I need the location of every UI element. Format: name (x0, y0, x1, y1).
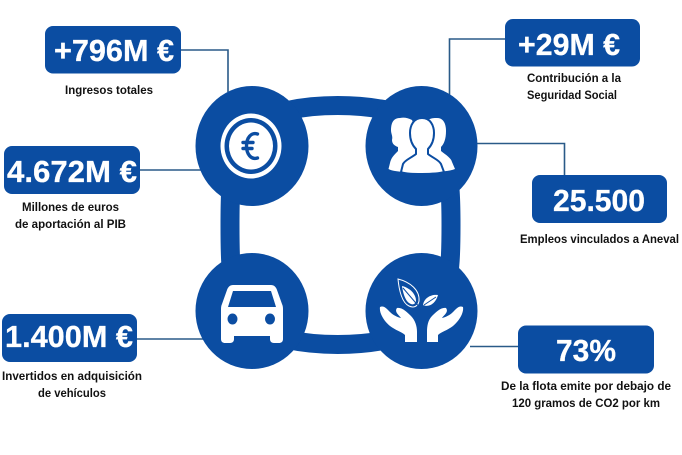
label: Invertidos (2, 369, 142, 400)
circle: euro coin (196, 86, 308, 206)
connector lines (137, 39, 564, 346)
label: Millones de euros: Millones de euros (22, 200, 119, 214)
stat card: +796M €: +796M € (54, 33, 174, 68)
stat card: 73% (518, 326, 654, 374)
label: flota (501, 379, 671, 410)
label: Invertidos: de vehículos (38, 386, 106, 400)
stat card: 73%: 73% (556, 333, 616, 368)
circle: car (196, 253, 308, 369)
icon: three people (388, 118, 455, 174)
label: flota: 120 gramos de CO2 por km (512, 396, 660, 410)
label: Ingresos totales: Ingresos totales (65, 83, 153, 97)
stat card: +29M €: +29M € (518, 27, 620, 62)
label: flota: De la flota emite por debajo de (501, 379, 671, 393)
stat card: 4.672M €: 4.672M € (7, 154, 137, 189)
circle: people (366, 86, 478, 206)
stat card: 25.500 (532, 175, 667, 223)
stat card: +29M € (505, 19, 640, 66)
label: Contribución: Contribución a la (527, 71, 621, 85)
label: Empleos: Empleos vinculados a Aneval (520, 232, 679, 246)
icon: euro coin (220, 114, 282, 178)
stat card: 25.500: 25.500 (553, 183, 645, 218)
label: Millones de euros: de aportación al PIB (15, 217, 126, 231)
stat card: +796M € (45, 26, 181, 74)
stat card: 4.672M € (4, 146, 140, 194)
icon: hands holding leaves (380, 279, 463, 342)
circle: hands and leaves (366, 253, 478, 369)
label: Invertidos: Invertidos en adquisición (2, 369, 142, 383)
icon: car (221, 285, 283, 343)
label: Contribución: Seguridad Social (527, 88, 617, 102)
central ring (230, 106, 451, 344)
stat card: 1.400M € (2, 314, 137, 362)
label: Contribución (527, 71, 621, 102)
stat card: 1.400M €: 1.400M € (5, 319, 133, 354)
label: Millones de euros (15, 200, 126, 231)
